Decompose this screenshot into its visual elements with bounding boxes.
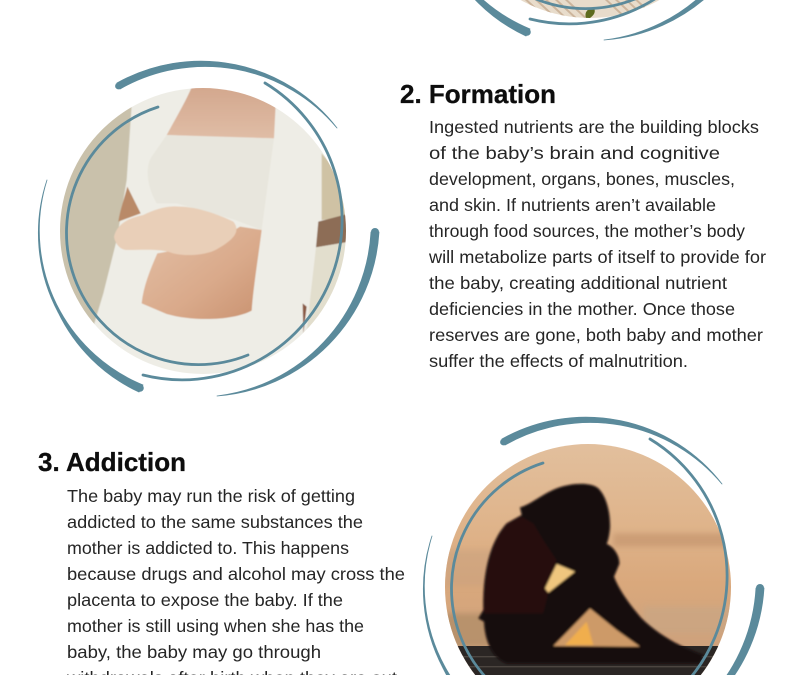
text block: addiction: placenta to expose the baby. If the bbox=[67, 590, 343, 610]
photo: silhouette at sunset bbox=[440, 440, 743, 675]
photo: rope texture bbox=[520, 0, 660, 18]
text block: formation: the baby, creating additional nutrient bbox=[429, 273, 727, 293]
text block: addiction: The baby may run the risk of getting bbox=[67, 486, 355, 506]
section 1 image: top circle with rings bbox=[475, 0, 704, 40]
text block: addiction: baby, the baby may go through bbox=[67, 642, 321, 662]
text block: formation: through food sources, the mother’s body bbox=[429, 221, 745, 241]
text block: formation: suffer the effects of malnutrition. bbox=[429, 351, 688, 371]
rings bbox=[38, 61, 379, 396]
text block: addiction: mother is addicted to. This happens bbox=[67, 538, 349, 558]
photo: pregnant belly bbox=[53, 80, 353, 380]
text block: addiction: addicted to the same substances the bbox=[67, 512, 363, 532]
gap under arm bbox=[545, 564, 575, 593]
text block: formation: Ingested nutrients are the building blocks bbox=[429, 117, 759, 137]
rings bbox=[425, 0, 766, 40]
section 2 image: pregnant belly circle with rings bbox=[38, 61, 379, 396]
text block: formation: and skin. If nutrients aren’t available bbox=[429, 195, 716, 215]
heading: 3. Addiction: 3. Addiction bbox=[38, 447, 186, 477]
text block: addiction bbox=[66, 486, 405, 675]
gap under knee bbox=[553, 608, 640, 647]
heading: 2. Formation: 2. Formation bbox=[400, 79, 556, 109]
text block: addiction: because drugs and alcohol may cross the bbox=[67, 564, 405, 584]
section 3 image: sad woman circle with rings bbox=[423, 417, 764, 675]
rings bbox=[423, 417, 764, 675]
text block: addiction: mother is still using when she has the bbox=[67, 616, 364, 636]
silhouette bbox=[478, 484, 703, 663]
text block: formation bbox=[428, 117, 766, 371]
text block: formation: deficiencies in the mother. Once those bbox=[429, 299, 735, 319]
deck bbox=[458, 646, 718, 675]
text block: formation: will metabolize parts of itself to provide for bbox=[428, 247, 766, 267]
text block: formation: of the baby’s brain and cognitive bbox=[429, 143, 720, 163]
text block: formation: reserves are gone, both baby and mother bbox=[429, 325, 763, 345]
text block: formation: development, organs, bones, muscles, bbox=[429, 169, 735, 189]
